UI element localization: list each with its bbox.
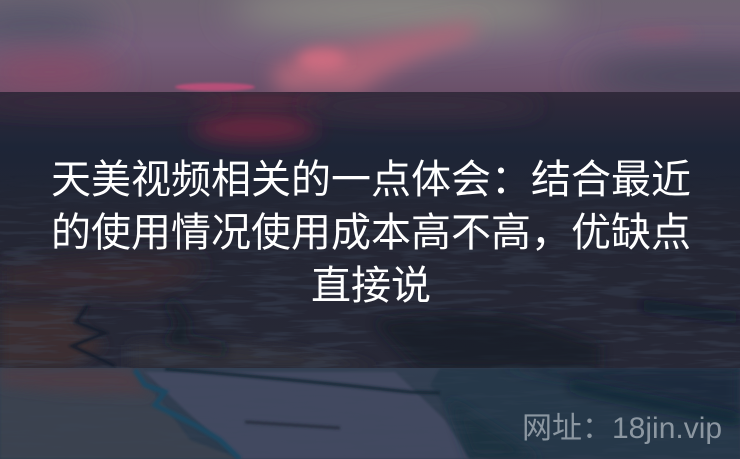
title (51, 158, 691, 308)
title: 直接说 (311, 264, 431, 308)
title: 的使用情况使用成本高不高，优缺点 (51, 211, 691, 255)
title: 天美视频相关的一点体会：结合最近 (51, 158, 691, 202)
watermark: site address: 网址：18jin.vip (522, 412, 722, 445)
